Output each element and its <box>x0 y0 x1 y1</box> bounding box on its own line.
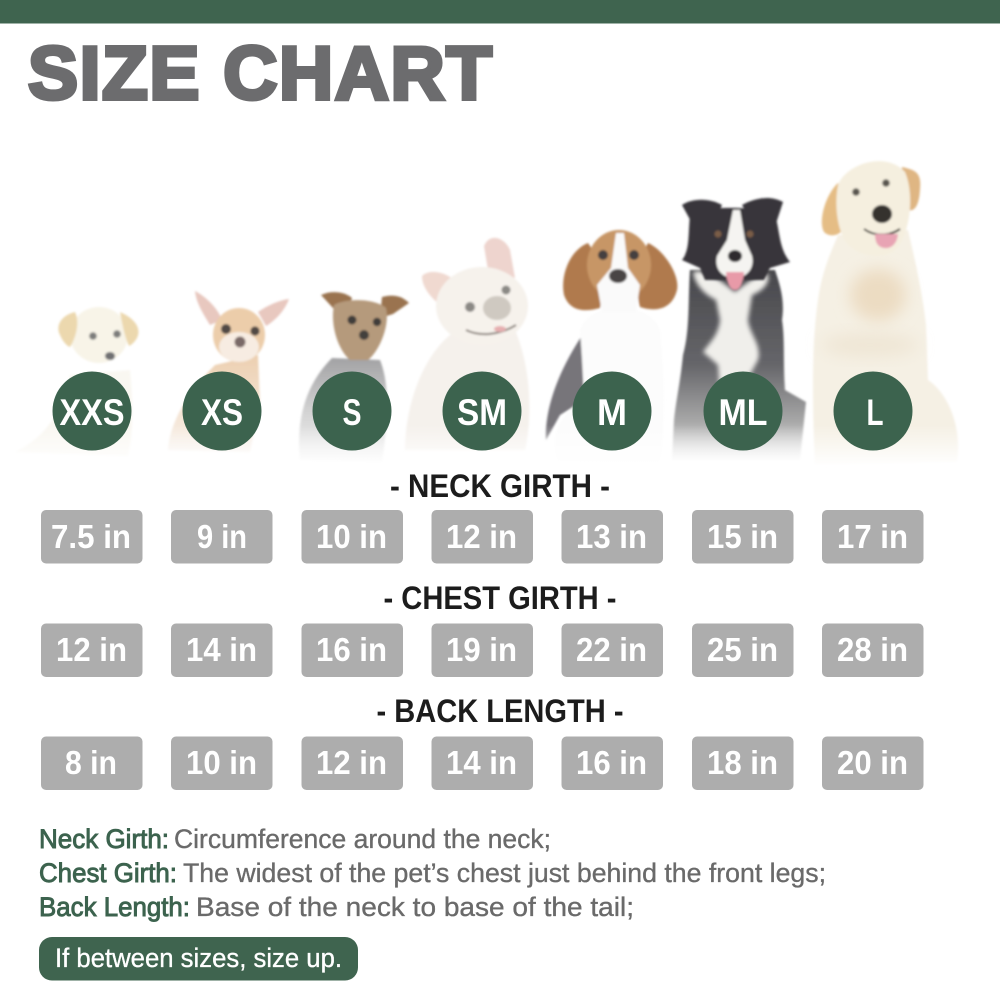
definition: back length: Base of the neck to base of the tail; <box>196 892 634 922</box>
row: chest girth values <box>41 624 924 677</box>
size badge: L: L <box>866 392 884 433</box>
size badge: XXS: XXS <box>60 392 124 433</box>
size badge: SM <box>442 372 522 450</box>
size badge: XS: XS <box>201 392 243 433</box>
dog: SM french bulldog <box>405 238 529 450</box>
callout: size up: If between sizes, size up. <box>55 943 342 973</box>
size badge: M: M <box>597 392 627 433</box>
size badge: XS <box>182 372 262 450</box>
row: back length values: 18 in <box>707 744 778 781</box>
row: chest girth values: 28 in <box>837 631 908 668</box>
heading: neck girth: - NECK GIRTH - <box>390 468 610 504</box>
size badge: S <box>312 372 392 450</box>
row: neck girth values: 17 in <box>837 518 908 555</box>
dog: XS chihuahua <box>168 291 289 452</box>
row: neck girth values: 12 in <box>446 518 517 555</box>
row: neck girth values: 15 in <box>707 518 778 555</box>
size badge: ML: ML <box>718 392 768 433</box>
row: back length values: 10 in <box>186 744 257 781</box>
dog: XXS puppy <box>15 307 138 456</box>
row: chest girth values: 25 in <box>707 631 778 668</box>
row: back length values <box>41 736 924 790</box>
size badge: SM: SM <box>457 392 507 433</box>
title: SIZE CHART <box>28 31 492 115</box>
row: back length values: 8 in <box>65 744 117 781</box>
row: back length values: 20 in <box>837 744 908 781</box>
row: back length values: 16 in <box>576 744 647 781</box>
size badge: ML <box>704 372 782 450</box>
row: chest girth values: 22 in <box>576 631 647 668</box>
row: neck girth values: 10 in <box>316 518 387 555</box>
heading: back length: - BACK LENGTH - <box>376 693 624 729</box>
definition: back length: Back Length: <box>39 892 190 922</box>
row: chest girth values: 12 in <box>56 631 127 668</box>
dog photo row <box>0 161 1000 467</box>
row: neck girth values: 7.5 in <box>51 518 131 555</box>
heading: chest girth: - CHEST GIRTH - <box>384 580 616 616</box>
definition: chest girth: Chest Girth: <box>39 858 177 888</box>
row: chest girth values: 19 in <box>446 631 517 668</box>
row: chest girth values: 16 in <box>316 631 387 668</box>
row: chest girth values: 14 in <box>186 631 257 668</box>
row: neck girth values: 9 in <box>197 518 247 555</box>
row: back length values: 14 in <box>446 744 517 781</box>
row: back length values: 12 in <box>316 744 387 781</box>
size badge: S: S <box>342 392 362 433</box>
definition: neck girth: Neck Girth: <box>39 824 169 854</box>
top band <box>0 0 1000 24</box>
callout: size up <box>39 937 358 980</box>
definition: chest girth: The widest of the pet’s chest just behind the front legs; <box>183 858 826 888</box>
dog: S yorkie <box>299 292 409 462</box>
ground fade <box>0 425 1000 467</box>
size badge: XXS <box>52 372 132 450</box>
dog: M beagle <box>546 230 677 464</box>
definition: neck girth: Circumference around the neck; <box>174 824 551 854</box>
dog: ML border collie <box>672 198 806 460</box>
row: neck girth values <box>41 510 924 564</box>
row: neck girth values: 13 in <box>576 518 647 555</box>
size badge: M <box>572 372 652 450</box>
dog: L golden retriever <box>813 161 958 465</box>
size badge: L <box>834 372 912 450</box>
